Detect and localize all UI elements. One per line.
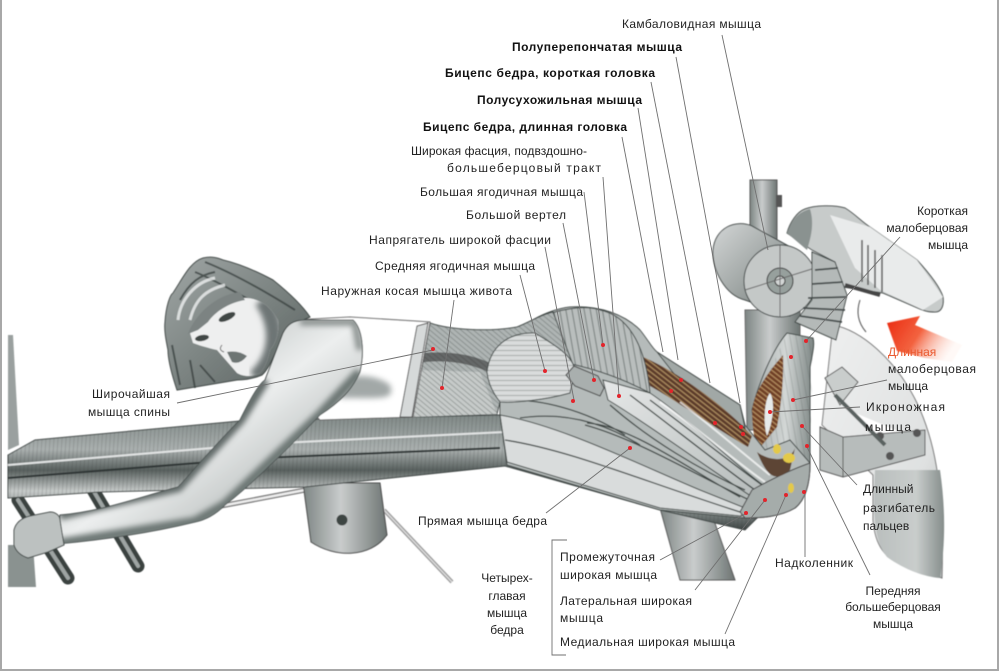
labels: top muscle names: Камбаловидная мышца bbox=[622, 17, 761, 31]
machine: vertical arm behind calf bbox=[745, 310, 800, 430]
label: peroneus brevis bbox=[886, 204, 968, 252]
leader lines bbox=[177, 35, 900, 655]
label: gastrocnemius bbox=[865, 400, 945, 434]
rectus femoris, lower light bands bbox=[500, 415, 750, 516]
label: tibialis anterior: мышца bbox=[873, 617, 913, 631]
label: peroneus longus: малоберцовая bbox=[888, 362, 976, 376]
machine: lever plate bbox=[822, 325, 944, 578]
machine: brace rods bbox=[200, 490, 452, 582]
label: latissimus dorsi: Широчайшая bbox=[92, 387, 170, 401]
labels: top muscle names bbox=[321, 17, 761, 298]
label: patella: Надколенник bbox=[775, 556, 854, 570]
labels: top muscle names: Напрягатель широкой фасции bbox=[369, 233, 551, 247]
labels: top muscle names: Наружная косая мышца живота bbox=[321, 284, 512, 298]
ankle wrap bbox=[795, 252, 847, 340]
label: gastrocnemius: Икроножная bbox=[866, 400, 945, 414]
machine: bench support post bbox=[303, 483, 387, 553]
greater trochanter bbox=[566, 366, 604, 396]
label: tibialis anterior: Передняя bbox=[865, 584, 921, 598]
machine: left frame posts bbox=[8, 335, 36, 587]
labels: top muscle names: Полуперепончатая мышца bbox=[512, 40, 682, 54]
label: extensor digitorum longus bbox=[863, 482, 935, 533]
label: extensor digitorum longus: разгибатель bbox=[863, 501, 935, 515]
machine: knee support post bbox=[660, 508, 735, 580]
labels: top muscle names: Большая ягодичная мышца bbox=[420, 185, 583, 199]
label: tibialis anterior bbox=[845, 584, 941, 631]
label: vastus intermedius bbox=[560, 550, 657, 582]
head: hair bbox=[165, 257, 310, 390]
labels: top muscle names: Бицепс бедра, длинная головка bbox=[423, 120, 627, 134]
label: extensor digitorum longus: Длинный bbox=[863, 482, 913, 496]
upper leg: thigh muscles bbox=[500, 307, 810, 518]
top band bbox=[657, 352, 745, 428]
label: rectus femoris: Прямая мышца бедра bbox=[418, 514, 547, 528]
label: vastus intermedius: Промежуточная bbox=[560, 550, 655, 564]
illustration: woman on leg curl machine bbox=[8, 180, 962, 587]
label: vastus intermedius: широкая мышца bbox=[560, 568, 657, 582]
machine: bracket with bolts bbox=[820, 367, 925, 477]
labels: top muscle names: Средняя ягодичная мышца bbox=[375, 259, 535, 273]
machine: foot roller bbox=[713, 224, 816, 317]
label: quadriceps: главая bbox=[488, 589, 526, 603]
label: vastus lateralis: мышца bbox=[560, 611, 603, 625]
label: peroneus longus: Длинная bbox=[888, 345, 936, 359]
label: quadriceps: мышца bbox=[487, 606, 527, 620]
label: peroneus brevis: малоберцовая bbox=[886, 221, 968, 235]
lower leg: calf muscles bbox=[752, 333, 814, 508]
label: tibialis anterior: большеберцовая bbox=[845, 600, 941, 614]
torso with white top bbox=[293, 317, 430, 420]
label: quadriceps: Четырех- bbox=[481, 571, 533, 585]
label: extensor digitorum longus: пальцев bbox=[863, 519, 909, 533]
machine: hand grip bars bbox=[18, 490, 138, 578]
label: peroneus longus bbox=[888, 345, 976, 393]
labels: top muscle names: Полусухожильная мышца bbox=[477, 93, 642, 107]
muscle marker dots bbox=[431, 339, 809, 515]
gluteus maximus bbox=[533, 308, 650, 393]
label: quadriceps bbox=[481, 571, 533, 637]
shoe bbox=[787, 206, 943, 332]
label: quadriceps: бедра bbox=[490, 623, 524, 637]
head: face bbox=[188, 292, 278, 378]
label: latissimus dorsi: мышца спины bbox=[88, 405, 170, 419]
knee bbox=[740, 463, 810, 518]
label: vastus lateralis bbox=[560, 594, 692, 625]
gluteus medius and oblique bbox=[413, 312, 575, 417]
thigh strands bbox=[500, 395, 762, 505]
label: gastrocnemius: мышца bbox=[865, 420, 911, 434]
hamstring, brown muscle bbox=[643, 357, 752, 447]
labels: top muscle names: Бицепс бедра, короткая головка bbox=[445, 66, 655, 80]
yellow tendons bbox=[773, 444, 795, 493]
labels: top muscle names: Широкая фасция, подвздошно- bbox=[411, 144, 587, 158]
label: peroneus brevis: Короткая bbox=[917, 204, 968, 218]
label: latissimus dorsi bbox=[88, 387, 170, 419]
label: vastus medialis: Медиальная широкая мышца bbox=[560, 635, 735, 649]
machine: bench pad bbox=[8, 415, 760, 530]
vastus lateralis, light band bbox=[603, 380, 770, 502]
arm and hand bbox=[14, 320, 362, 558]
red arrow bbox=[887, 316, 962, 362]
labels: top muscle names: большеберцовый тракт bbox=[447, 161, 602, 175]
soleus, brown muscle bbox=[752, 355, 783, 450]
labels: top muscle names: Большой вертел bbox=[466, 208, 566, 222]
machine: upright post bbox=[750, 180, 782, 240]
label: peroneus longus: мышца bbox=[888, 379, 928, 393]
label: peroneus brevis: мышца bbox=[928, 238, 968, 252]
label: vastus lateralis: Латеральная широкая bbox=[560, 594, 692, 608]
